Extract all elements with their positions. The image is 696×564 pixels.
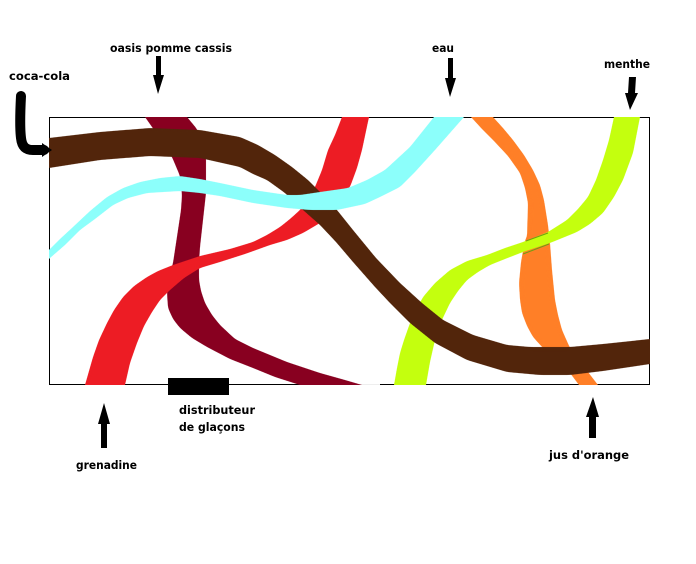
arrow: jus d'orange [586,397,599,438]
label: menthe: menthe [604,57,650,71]
arrow: grenadine [98,403,110,448]
flow: coca-cola (brown) [40,128,660,375]
label: distributeur de glaçons [179,403,255,434]
flow: orange juice (orange) [471,117,598,385]
label: jus d'orange: jus d'orange [548,448,629,462]
diagram: drink dispenser flows [10,43,650,472]
flow: oasis pomme cassis (dark red) [145,117,362,385]
flow: mint (lime green) [392,108,642,394]
arrow: coca-cola [20,96,52,157]
crossing edges: mint over orange [523,233,549,254]
label: eau: eau [432,41,454,55]
ice dispenser block [168,378,229,395]
flow: water (cyan) [49,117,464,259]
label: grenadine: grenadine [76,458,137,472]
label: distributeur de glaçons: distributeur [179,403,255,417]
arrow: menthe [625,77,638,110]
flow: grenadine (red) [82,108,372,394]
arrow: oasis pomme cassis [153,56,164,94]
label: distributeur de glaçons: de glaçons [179,420,245,434]
arrow: eau [445,58,456,97]
label: oasis pomme cassis: oasis pomme cassis [110,41,232,55]
label: coca-cola: coca-cola [9,69,70,83]
